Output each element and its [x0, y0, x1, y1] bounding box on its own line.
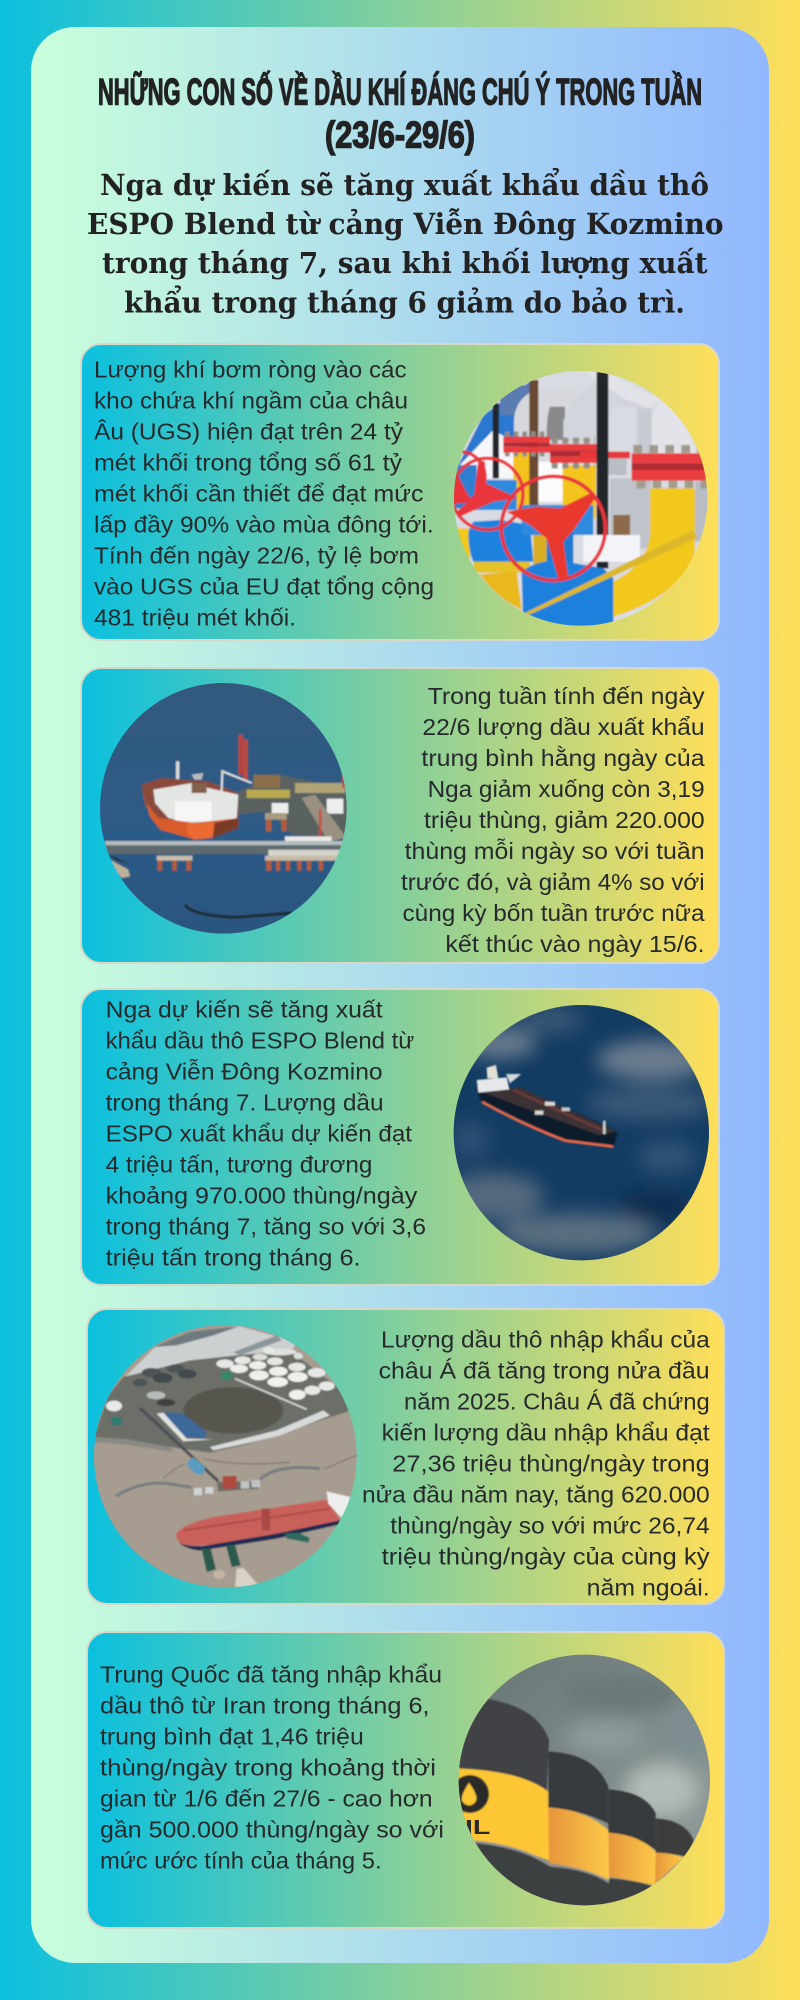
cloud haze: [562, 1673, 712, 1817]
card 5 text: thùng/ngày trong khoảng thời: [100, 1755, 436, 1781]
photo: oil barrels: [451, 1650, 715, 1913]
subtitle: khẩu trong tháng 6 giảm do bảo trì.: [124, 284, 685, 320]
card 5 text: mức ước tính của tháng 5.: [100, 1848, 382, 1874]
card 2 text: Trong tuần tính đến ngày: [428, 683, 705, 709]
card 3 text: triệu tấn trong tháng 6.: [106, 1244, 361, 1270]
card 1 text: 481 triệu mét khối.: [94, 604, 296, 630]
card 2 text: thùng mỗi ngày so với tuần: [405, 838, 705, 864]
card 4 text: thùng/ngày so với mức 26,74: [390, 1512, 710, 1538]
card 1: European gas storage: [81, 344, 719, 640]
subtitle: ESPO Blend từ cảng Viễn Đông Kozmino: [87, 207, 724, 241]
photo: pipeline valves: [454, 371, 708, 626]
card 4 text: năm 2025. Châu Á đã chứng: [404, 1388, 710, 1414]
photo: tanker at sea: [443, 1000, 715, 1265]
photo: port with crude tanker: [90, 1322, 360, 1592]
card 1 text: mét khối cần thiết để đạt mức: [94, 480, 424, 506]
card 2 text: [401, 683, 706, 957]
card 4: Asian crude imports: [87, 1309, 724, 1604]
subtitle: [87, 166, 724, 320]
card 3 text: ESPO xuất khẩu dự kiến đạt: [106, 1120, 412, 1146]
card 2 text: cùng kỳ bốn tuần trước nữa: [402, 900, 705, 926]
card 3 text: khoảng 970.000 thùng/ngày: [106, 1182, 418, 1208]
card 4 text: [362, 1326, 711, 1600]
card 1 text: Âu (UGS) hiện đạt trên 24 tỷ: [94, 418, 403, 444]
card 3 text: Nga dự kiến sẽ tăng xuất: [106, 996, 383, 1022]
card 3 text: trong tháng 7. Lượng dầu: [106, 1089, 384, 1115]
card 2: Russian oil exports: [81, 668, 719, 963]
subtitle: trong tháng 7, sau khi khối lượng xuất: [102, 246, 708, 280]
card 1 text: lấp đầy 90% vào mùa đông tới.: [94, 512, 434, 538]
card 5: China's imports from Iran: [87, 1632, 724, 1928]
card 2 text: kết thúc vào ngày 15/6.: [445, 931, 705, 957]
card 3 text: 4 triệu tấn, tương đương: [106, 1151, 372, 1177]
card 5 text: Trung Quốc đã tăng nhập khẩu: [100, 1662, 442, 1688]
card 2 text: trước đó, và giảm 4% so với: [401, 869, 705, 895]
card 1 text: Tính đến ngày 22/6, tỷ lệ bơm: [94, 542, 419, 568]
card 5 text: gần 500.000 thùng/ngày so với: [100, 1817, 444, 1843]
card 2 text: triệu thùng, giảm 220.000: [424, 807, 705, 833]
card 4 text: Lượng dầu thô nhập khẩu của: [381, 1326, 711, 1352]
card 1 text: vào UGS của EU đạt tổng cộng: [94, 574, 434, 600]
card 4 text: năm ngoái.: [587, 1574, 710, 1600]
card 3 text: khẩu dầu thô ESPO Blend từ: [106, 1027, 415, 1053]
card 4 text: kiến lượng dầu nhập khẩu đạt: [382, 1419, 710, 1445]
card 1 text: [94, 356, 434, 630]
card 4 text: nửa đầu năm nay, tăng 620.000: [362, 1481, 710, 1507]
card 2 text: trung bình hằng ngày của: [421, 745, 706, 771]
card 4 text: châu Á đã tăng trong nửa đầu: [379, 1357, 710, 1383]
card 3: ESPO Blend exports: [81, 989, 719, 1285]
card 3 text: cảng Viễn Đông Kozmino: [106, 1058, 383, 1084]
card 5 text: dầu thô từ Iran trong tháng 6,: [100, 1693, 430, 1719]
subtitle: Nga dự kiến sẽ tăng xuất khẩu dầu thô: [100, 166, 709, 202]
card 5 text: [100, 1662, 444, 1874]
card 2 text: Nga giảm xuống còn 3,19: [428, 776, 705, 802]
sea haze: [443, 1008, 713, 1253]
card 1 text: mét khối trong tổng số 61 tỷ: [94, 450, 402, 476]
card 5 text: gian từ 1/6 đến 27/6 - cao hơn: [100, 1786, 433, 1812]
barrel label: IL: [465, 1816, 490, 1839]
title: [98, 70, 702, 156]
card 3 text: trong tháng 7, tăng so với 3,6: [106, 1213, 426, 1239]
card 2 text: 22/6 lượng dầu xuất khẩu: [422, 714, 705, 740]
card 3 text: [106, 996, 426, 1270]
photo: oil terminal jetty: [100, 683, 347, 934]
card 4 text: 27,36 triệu thùng/ngày trong: [392, 1450, 710, 1476]
card 1 text: kho chứa khí ngầm của châu: [94, 388, 408, 414]
card 4 text: triệu thùng/ngày của cùng kỳ: [382, 1543, 710, 1569]
card 5 text: trung bình đạt 1,46 triệu: [100, 1724, 364, 1750]
card 1 text: Lượng khí bơm ròng vào các: [94, 356, 407, 382]
title: (23/6-29/6): [325, 114, 475, 156]
